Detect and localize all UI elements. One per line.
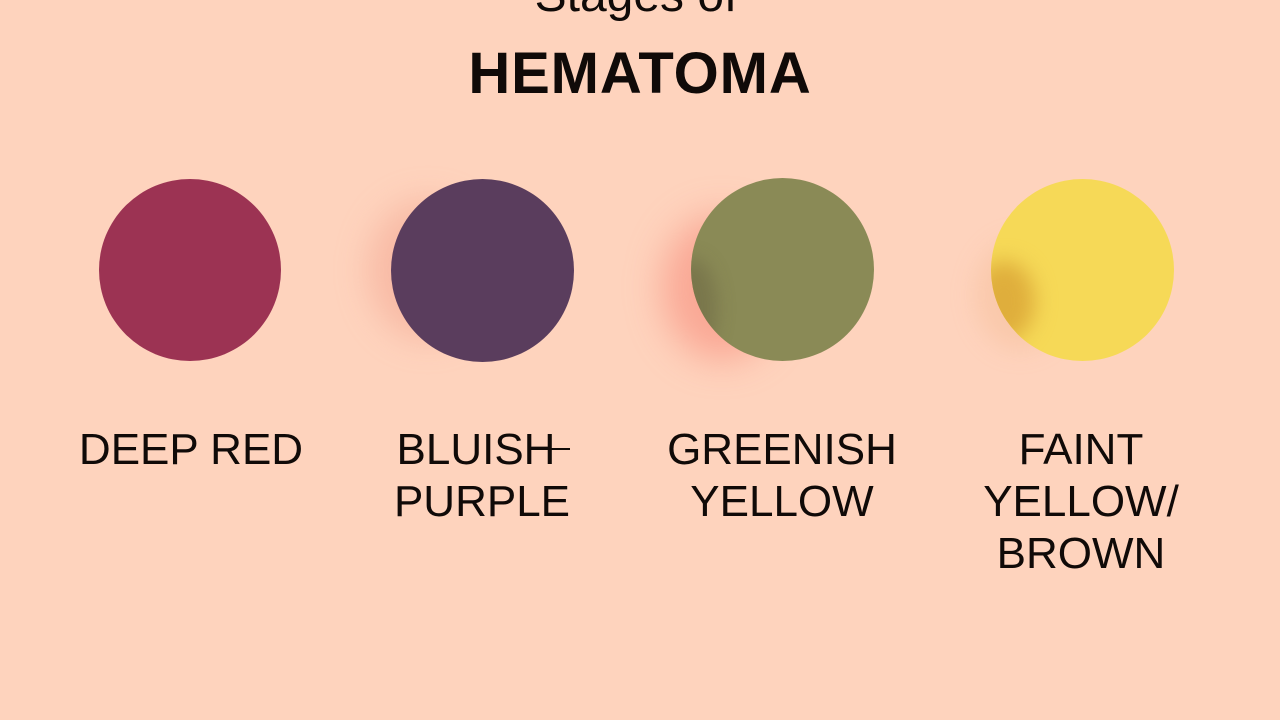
- stage 3 label: [667, 425, 897, 526]
- stage 3 label: GREENISH: [667, 425, 897, 474]
- hyphen stroke: [550, 448, 570, 450]
- stage 2 label: PURPLE: [394, 477, 570, 526]
- circle shading: [667, 258, 717, 358]
- stage 4 label: [983, 425, 1179, 578]
- stage 3: greenish yellow circle: [691, 178, 874, 361]
- stage 2 label: [394, 425, 570, 526]
- stage 4 shadow: [975, 240, 1065, 350]
- heading: HEMATOMA: HEMATOMA: [468, 41, 812, 106]
- title: [468, 0, 812, 106]
- stage 4 label: FAINT: [1019, 425, 1143, 474]
- stage 4: faint yellow circle: [991, 179, 1174, 361]
- stage 3 label: YELLOW: [690, 477, 874, 526]
- stage 4 label: YELLOW/: [983, 477, 1179, 526]
- stage 2 label: BLUISH: [397, 425, 555, 474]
- stage 1: deep red circle: [99, 179, 281, 361]
- circle shading: [973, 261, 1035, 341]
- stage 2 shadow: [368, 200, 488, 340]
- stage 2: bluish purple circle: [391, 179, 574, 362]
- stage 4 label: BROWN: [997, 529, 1165, 578]
- stage 3 shadow: [662, 215, 782, 360]
- stage 1 label: DEEP RED: [79, 425, 303, 474]
